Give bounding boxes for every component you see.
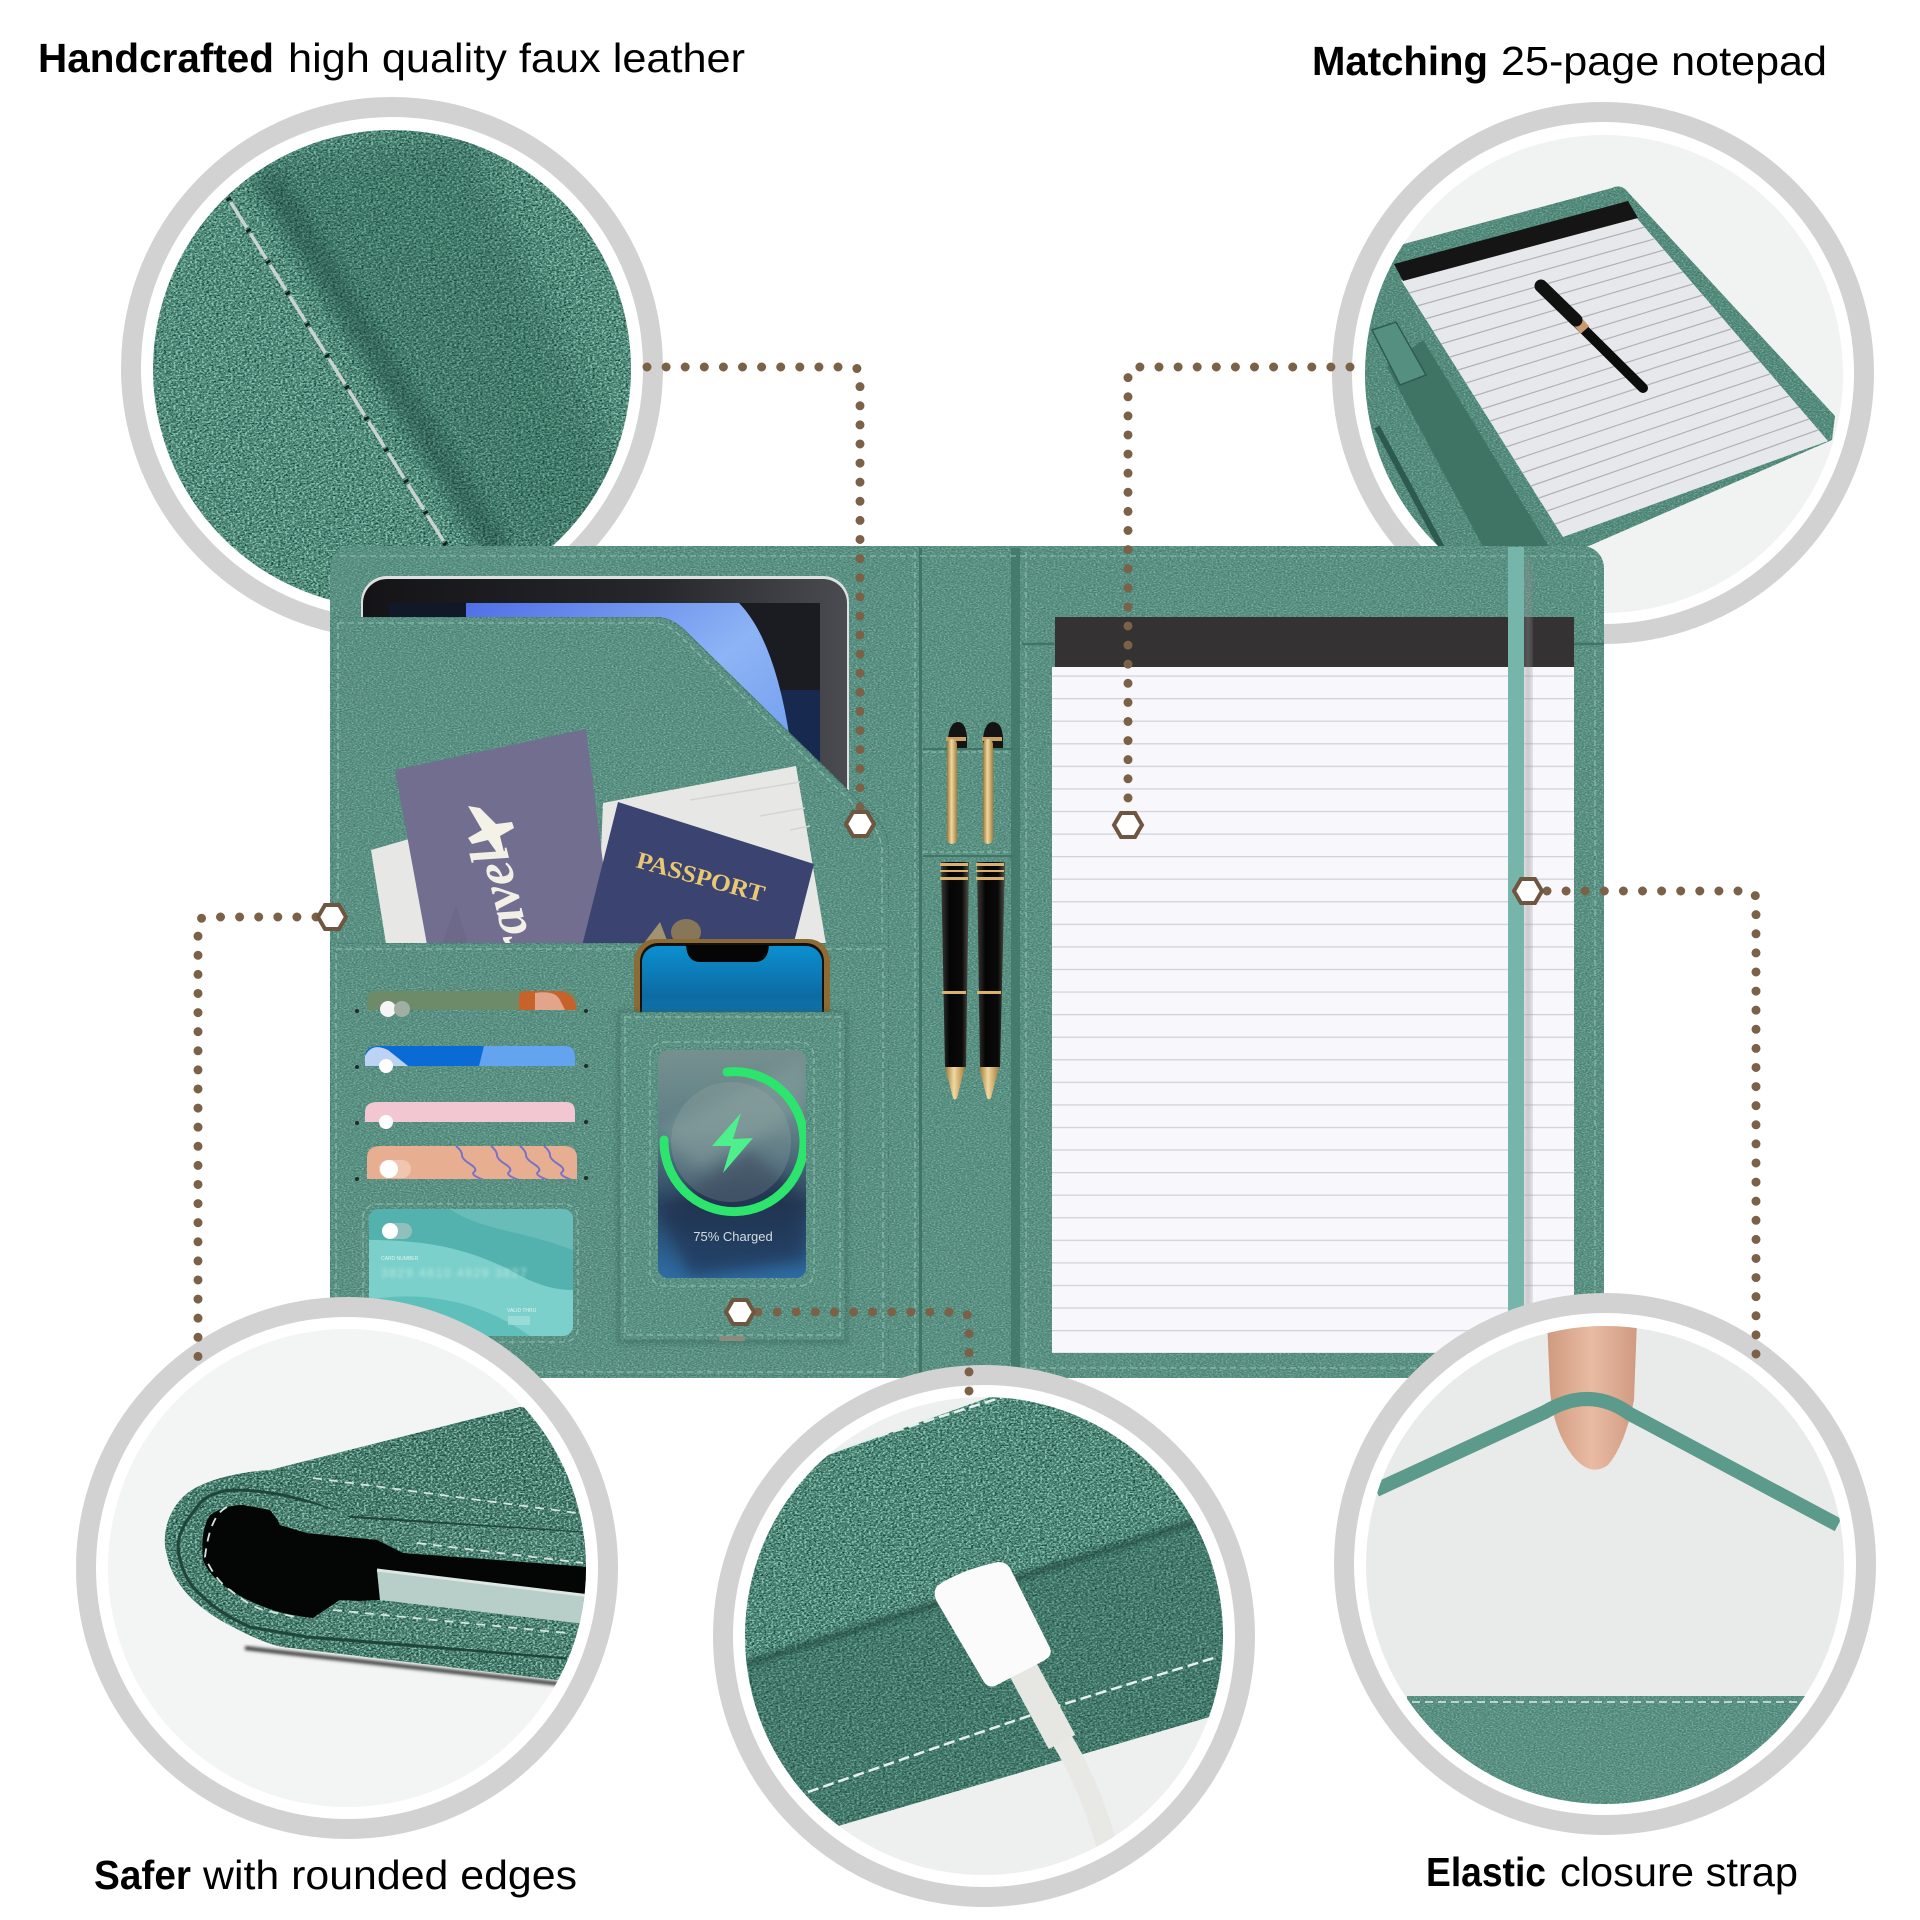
document flap pocket (332, 617, 889, 945)
front card pocket (330, 943, 889, 1376)
card: blue (365, 1046, 575, 1073)
heading: notepad (1312, 38, 1827, 84)
travel card (395, 729, 614, 994)
heading: elastic strap: Elastic (1426, 1849, 1546, 1895)
leader line: charging (758, 1312, 969, 1400)
pen on paper (1572, 325, 1648, 393)
stitching (205, 1478, 583, 1633)
note paper right (597, 766, 827, 950)
stitching on cover (340, 552, 1596, 1372)
lower flap shadow (745, 1521, 1240, 1826)
charging ring (664, 1072, 804, 1212)
heading: faux leather: high quality faux leather (288, 35, 745, 81)
wireless charging screen: 75% Charged (693, 1229, 773, 1244)
pen 2 (976, 722, 1005, 1100)
heading: notepad: 25-page notepad (1501, 38, 1827, 84)
card: teal: 3829 4810 4829 3827 (381, 1266, 528, 1280)
usb plug (935, 1562, 1051, 1686)
card slots (355, 991, 588, 1342)
phone (634, 939, 830, 1059)
card: teal (369, 1209, 573, 1336)
phone sleeve with window (617, 1010, 848, 1344)
flap stitching (338, 623, 882, 940)
circle: charging cable pocket (723, 1375, 1245, 1897)
circle: matching notepad (1340, 112, 1864, 634)
card window (363, 1204, 578, 1342)
marker: notepad (1114, 813, 1142, 837)
pocket stitching (336, 949, 883, 1372)
inner dark channel (1387, 340, 1548, 546)
marker: leather (846, 812, 874, 836)
inner black gap (202, 1505, 590, 1618)
circle: faux leather close-up (131, 107, 653, 629)
pen holders (923, 722, 1013, 1100)
heading: elastic strap (1426, 1849, 1798, 1895)
leader line: leather (647, 367, 860, 808)
leader line: notepad (1128, 367, 1350, 808)
card: peach (367, 1146, 577, 1180)
icon: lightning bolt (712, 1113, 753, 1173)
fold inner edge (178, 1490, 583, 1658)
note paper left (371, 839, 430, 950)
heading: elastic strap: closure strap (1560, 1849, 1798, 1895)
stitching (808, 1395, 1217, 1792)
heading: faux leather (38, 35, 745, 81)
elastic (1376, 1399, 1838, 1525)
passport: PASSPORT (633, 848, 768, 908)
folder body (165, 1407, 600, 1680)
leader line: elastic (1547, 891, 1756, 1356)
card: pink (365, 1102, 575, 1129)
marker: elastic (1514, 879, 1542, 903)
leader line: rounded edges (198, 917, 316, 1362)
circle: rounded edges (86, 1307, 608, 1829)
marker: charging (726, 1300, 754, 1324)
finger (1547, 1320, 1637, 1470)
slot stitches (355, 1009, 588, 1181)
card: teal: CARD NUMBER (381, 1256, 419, 1262)
shadow under folder (245, 1648, 560, 1684)
lower lip (307, 1600, 585, 1658)
heading: faux leather: Handcrafted (38, 35, 274, 81)
circle: elastic closure strap (1344, 1303, 1866, 1825)
tablet in back pocket (361, 576, 849, 790)
upper flap leather (740, 1390, 1240, 1826)
pen 1 (940, 722, 969, 1100)
upper lip (273, 1502, 590, 1567)
icon: airplane (468, 806, 514, 854)
card: olive (367, 991, 577, 1017)
notebook block (377, 1570, 590, 1624)
heading: rounded edges: with rounded edges (202, 1852, 577, 1898)
pen loop (1372, 322, 1426, 385)
card: teal: VALID THRU (507, 1308, 537, 1314)
elastic strap (1508, 547, 1532, 1350)
spine creases (887, 548, 1020, 1376)
charging cable (1020, 1664, 1108, 1850)
heading: rounded edges: Safer (94, 1852, 191, 1898)
folder base cover (330, 546, 1604, 1378)
wireless charging screen (658, 1050, 806, 1278)
passport (581, 802, 814, 950)
heading: notepad: Matching (1312, 38, 1488, 84)
pocket leather (1407, 1696, 1807, 1816)
travel card: Travel (459, 841, 552, 994)
paper sheet (1401, 216, 1828, 537)
marker: rounded edges (318, 905, 346, 929)
notepad pocket edge (1022, 643, 1604, 645)
folder: open padfolio (330, 546, 1604, 1378)
legal notepad (1052, 617, 1574, 1353)
